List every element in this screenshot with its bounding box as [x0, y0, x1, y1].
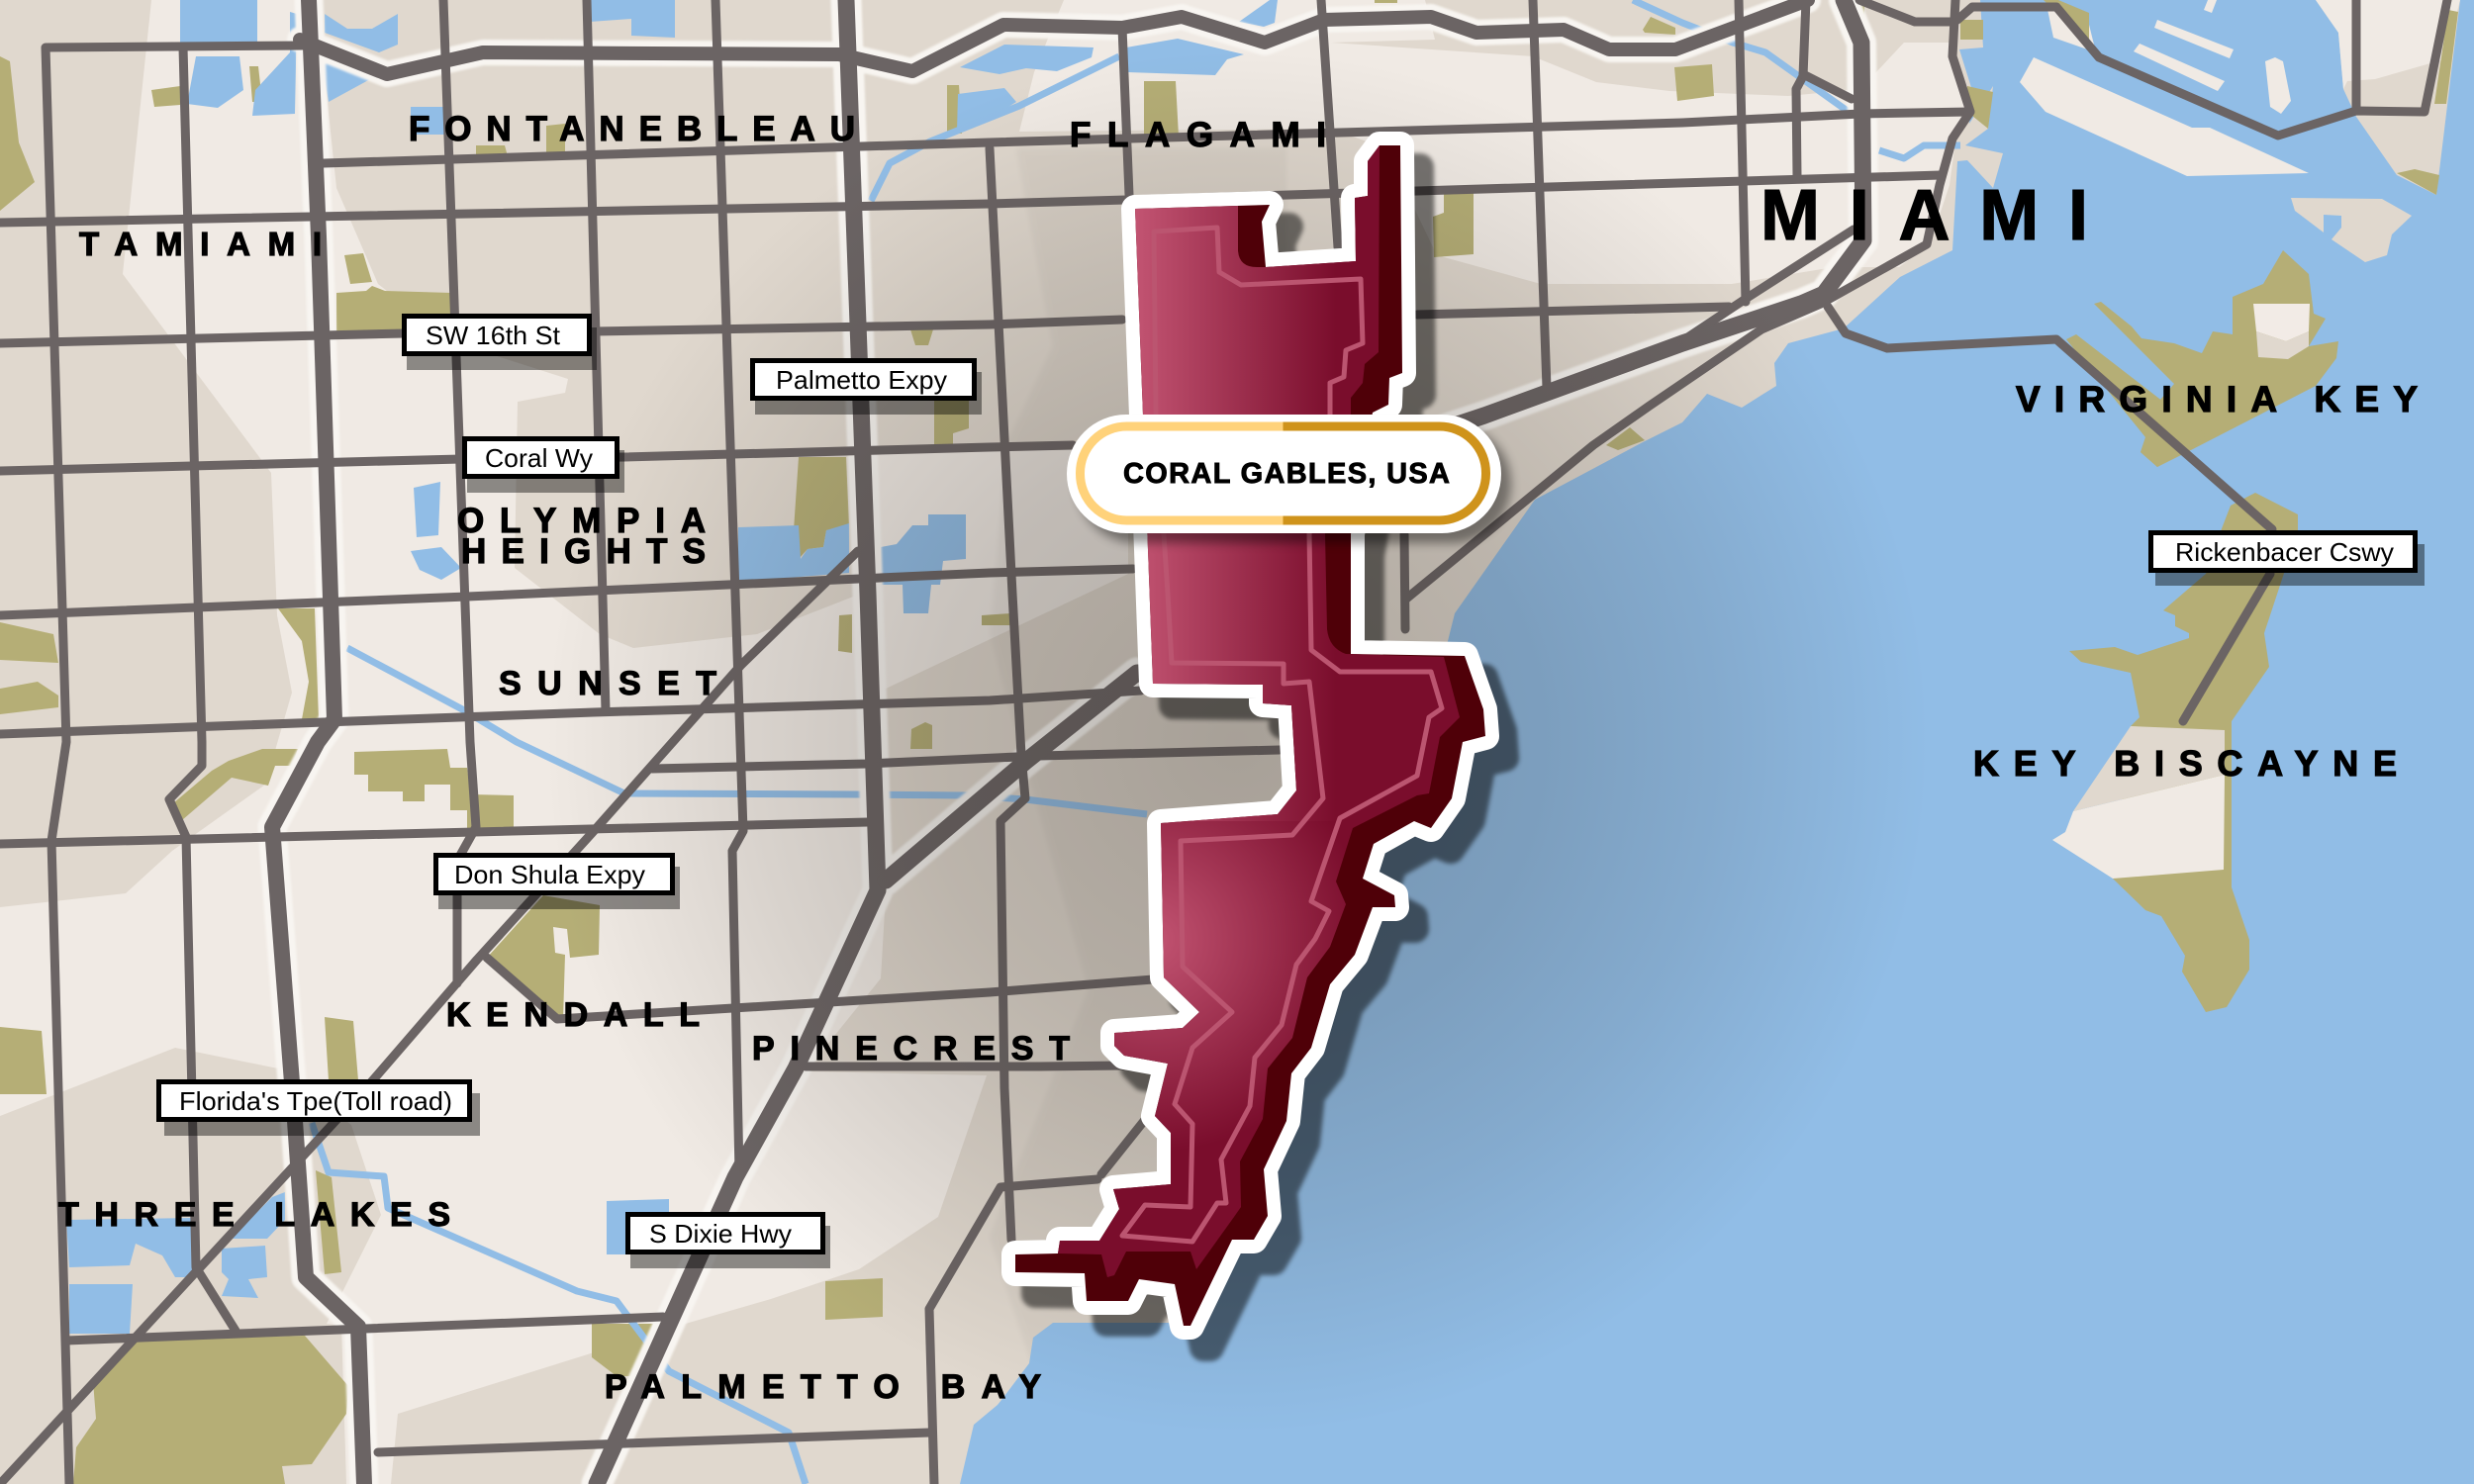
place names: FONTANEBLEAU — [409, 110, 855, 148]
road label: Palmetto Expy: Palmetto Expy — [776, 365, 947, 395]
place names: MIAMI — [1760, 176, 2088, 255]
place names: SUNSET — [499, 665, 716, 702]
canals — [312, 0, 1960, 1484]
place names: KEY BISCAYNE — [1973, 743, 2397, 784]
lakes — [66, 0, 1278, 1334]
place names: HEIGHTS — [461, 532, 706, 571]
place names: KENDALL — [446, 996, 700, 1034]
road label: S Dixie Hwy: S Dixie Hwy — [649, 1219, 792, 1249]
region inner pink line — [1122, 228, 1442, 1242]
road label: SW 16th St — [404, 317, 597, 370]
place names: THREE LAKES — [58, 1196, 450, 1234]
road label: S Dixie Hwy — [627, 1215, 830, 1268]
place names: PALMETTO BAY — [605, 1368, 1041, 1406]
islands — [2020, 0, 2460, 1012]
road label: Don Shula Expy: Don Shula Expy — [454, 860, 645, 889]
light land zones — [0, 0, 1970, 1484]
region gradient body — [1058, 145, 1460, 1277]
callout: Coral Gables, USA: CORAL GABLES, USA — [1123, 458, 1450, 490]
major road casings — [272, 0, 1863, 1484]
place names: TAMIAMI — [79, 226, 322, 262]
region dark edge — [1015, 145, 1485, 1326]
road label: Coral Wy — [465, 439, 624, 493]
ocean water — [960, 0, 2474, 1484]
major roads — [272, 0, 1863, 1484]
region drop shadow — [1035, 167, 1505, 1347]
road label: Don Shula Expy — [435, 855, 680, 909]
place names: OLYMPIA — [457, 502, 706, 540]
place names: PINECREST — [752, 1030, 1070, 1067]
road labels — [158, 317, 2425, 1268]
road label: Palmetto Expy — [752, 360, 982, 415]
road label: Rickenbacer Cswy: Rickenbacer Cswy — [2175, 537, 2394, 567]
road label: Florida's Tpe — [158, 1082, 480, 1136]
place names: FLAGAMI — [1070, 116, 1326, 154]
road label: Coral Wy: Coral Wy — [485, 443, 593, 473]
place names: VIRGINIA KEY — [2016, 379, 2418, 419]
road label: Florida's Tpe: Florida's Tpe(Toll road) — [179, 1086, 452, 1116]
callout: Coral Gables, USA — [1067, 415, 1511, 543]
road label: Rickenbacer Cswy — [2151, 532, 2425, 586]
darker zone west of region — [990, 148, 1286, 1385]
region white outline — [1015, 145, 1485, 1326]
highlighted region: Coral Gables — [990, 99, 1544, 1347]
road label: SW 16th St: SW 16th St — [426, 321, 561, 350]
